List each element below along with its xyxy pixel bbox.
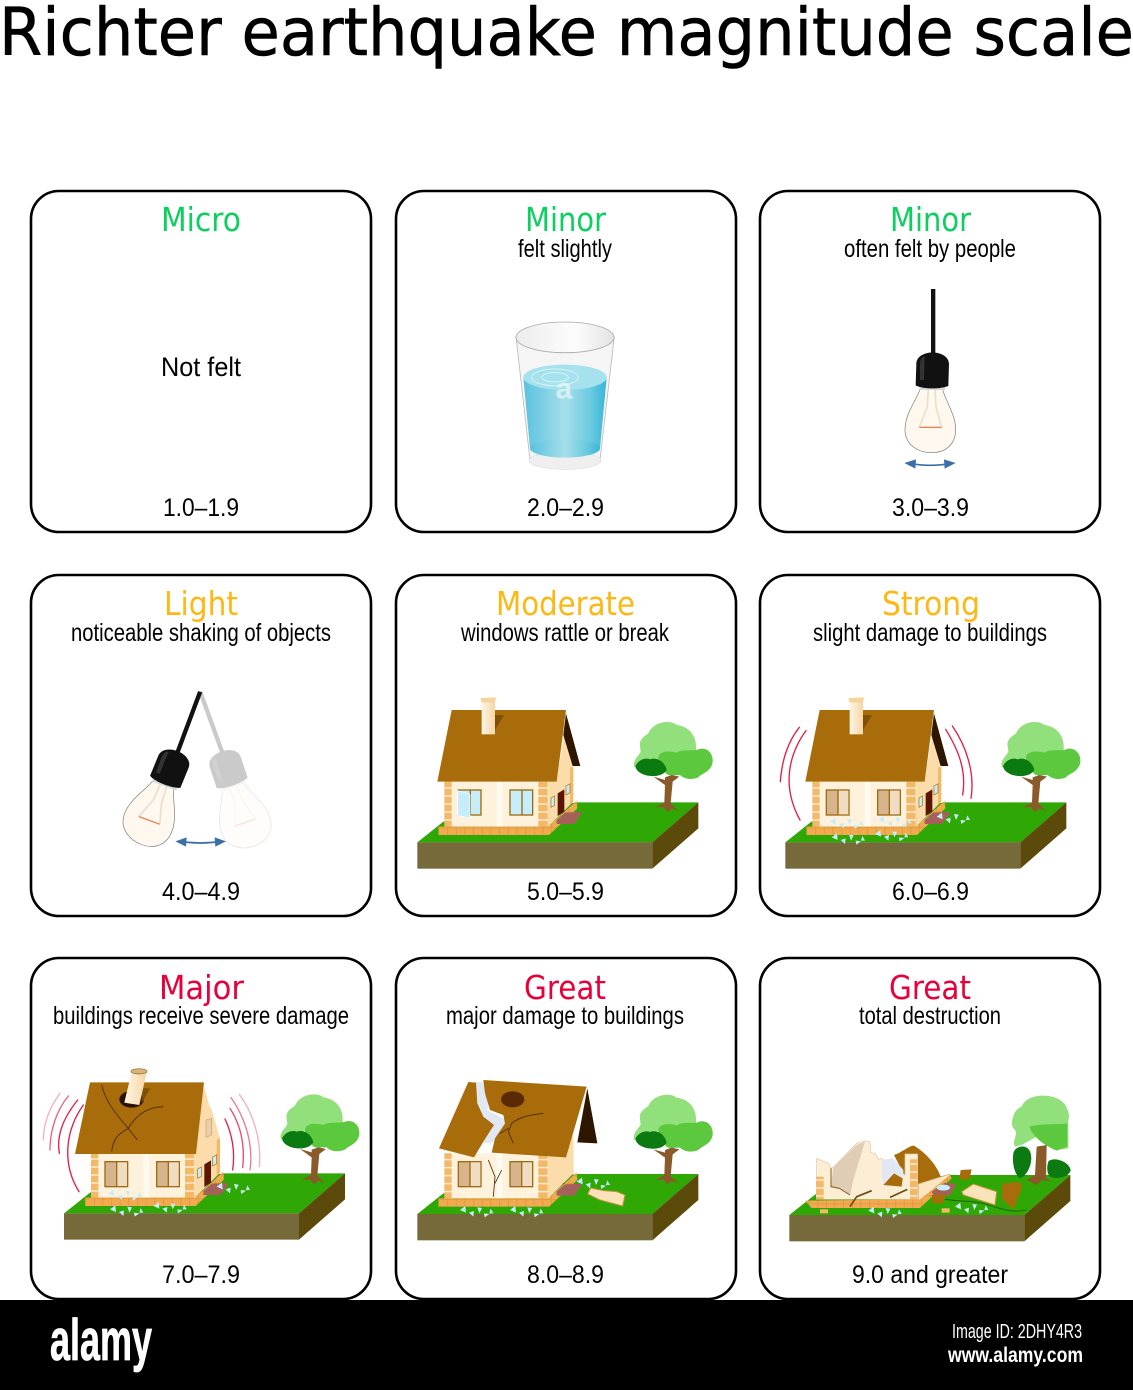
roof cracks [102,1085,163,1152]
description: noticeable shaking of objects [71,619,331,647]
card frame [760,575,1100,916]
image id: Image ID: 2DHY4R3 [952,1321,1082,1343]
heading: Major [159,968,244,1007]
panel: moderate 5.0–5.9 [396,575,736,916]
icon: swinging light bulb [116,682,277,855]
shock waves [780,726,972,820]
magnitude range: 7.0–7.9 [162,1261,240,1289]
roof left section [439,1082,494,1157]
website: www.alamy.com [947,1344,1083,1367]
heading: Moderate [496,584,635,623]
card frame [396,191,736,532]
panel: minor 3.0–3.9 [760,191,1100,532]
roof gap [475,1082,506,1143]
logo: alamy [50,1308,152,1373]
magnitude range: 1.0–1.9 [163,494,239,522]
magnitude range: 3.0–3.9 [892,494,969,522]
roof right section [483,1080,587,1157]
description: Not felt [161,352,241,382]
footer bar [0,1300,1133,1390]
roof hole and chimney [119,1069,150,1108]
heading: Great [524,968,606,1007]
broken glass debris [460,1178,610,1217]
panel: light 4.0–4.9 [31,575,371,916]
shock waves [43,1093,260,1192]
fallen beams [850,1189,907,1207]
heading: Minor [890,200,971,239]
magnitude range: 8.0–8.9 [527,1261,604,1289]
panel: minor 2.0–2.9 [396,191,736,532]
foundation [805,1175,952,1208]
magnitude range: 2.0–2.9 [527,494,604,522]
card frame [760,191,1100,532]
card frame [760,958,1100,1299]
collapsed roof [894,1146,942,1190]
broken glass debris [108,1183,250,1217]
damaged tree [1012,1096,1071,1185]
card frame [396,575,736,916]
card frame [31,191,371,532]
arrow: swing direction [904,459,956,469]
magnitude range: 9.0 and greater [852,1261,1008,1289]
description: often felt by people [844,235,1016,263]
roof hole [501,1091,524,1107]
description: buildings receive severe damage [53,1002,349,1030]
card frame [31,575,371,916]
fallen chimney [588,1188,625,1206]
broken glass debris [830,813,970,845]
magnitude range: 5.0–5.9 [527,878,604,906]
side wall remnant [918,1174,950,1202]
ruined walls [817,1141,918,1199]
wall crack [488,1160,502,1197]
magnitude range: 4.0–4.9 [162,878,240,906]
icon: hanging light bulb [904,289,956,469]
illustration: collapsed house [789,1096,1071,1241]
card frame [31,958,371,1299]
heading: Minor [525,200,606,239]
panel: great 8.0–8.9 [396,958,736,1299]
card frame [396,958,736,1299]
description: slight damage to buildings [813,619,1047,647]
rubble [820,1169,1027,1218]
arrow: swing direction [175,837,226,847]
watermark glyph: a [556,373,573,406]
description: major damage to buildings [446,1002,684,1030]
illustration: house with open window [417,697,713,869]
heading: Strong [882,584,980,623]
panel: great 9.0 and greater [760,958,1100,1299]
heading: Light [164,584,238,623]
heading: Micro [161,200,241,239]
panel: micro 1.0–1.9 [31,191,371,532]
description: windows rattle or break [460,619,669,647]
illustration: house with split roof [417,1080,713,1240]
illustration: shaking house with broken glass [780,697,1080,869]
magnitude range: 6.0–6.9 [892,878,969,906]
icon: glass of water [516,322,614,469]
description: total destruction [859,1002,1001,1030]
panel: major 7.0–7.9 [31,958,371,1299]
heading: Great [889,968,971,1007]
panel: strong 6.0–6.9 [760,575,1100,916]
description: felt slightly [518,235,612,263]
illustration: house with cracked roof [43,1069,359,1240]
